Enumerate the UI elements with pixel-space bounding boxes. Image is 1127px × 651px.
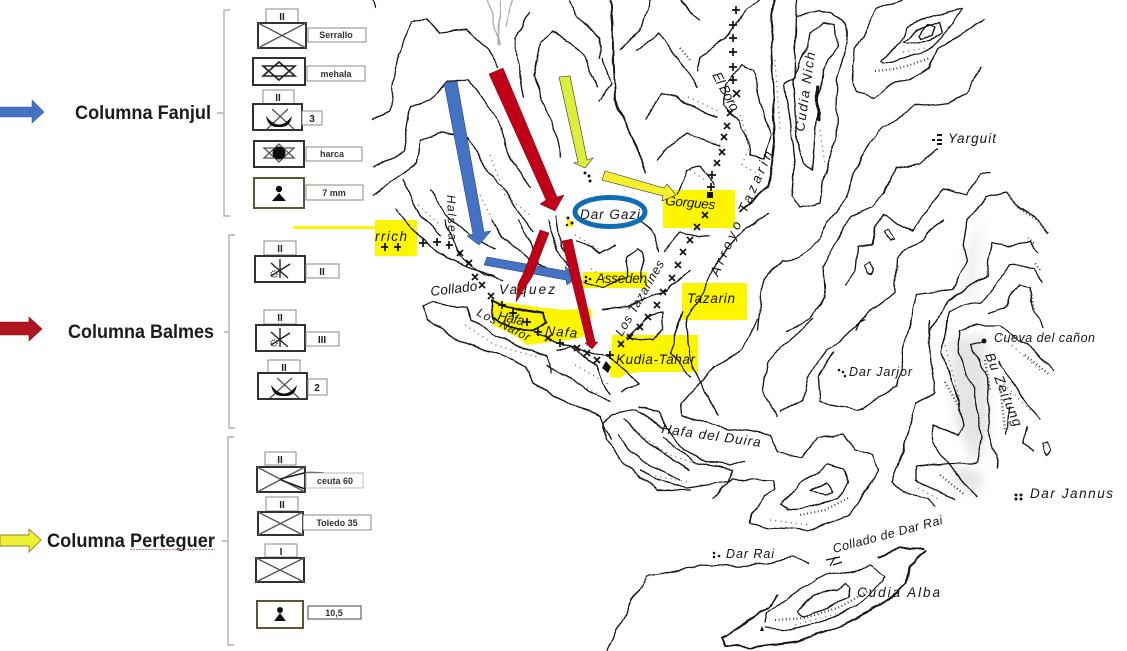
map labels: rrich: [375, 229, 407, 244]
unit: 3: 3: [309, 114, 315, 125]
arrow: red column first leg: [489, 68, 564, 211]
unit: 10,5: [257, 601, 361, 628]
arrow: blue column second leg: [484, 257, 577, 285]
pass symbol: Collado de Dar Rai: [826, 557, 842, 566]
map labels: Arroyo Tazarin: [707, 149, 776, 279]
unit: I: I: [280, 547, 283, 558]
unit: 7 mm: 7 mm: [322, 188, 346, 198]
bracket: Fanjul units: [217, 10, 230, 216]
heading: Columna Perteguer: Columna Perteguer: [47, 531, 216, 552]
map labels: [375, 51, 1113, 600]
map labels: Cudia Alba: [857, 585, 940, 600]
heading: Columna Balmes: Columna Balmes: [68, 322, 214, 343]
panel: legend of columns: [0, 9, 371, 645]
spelling squiggle: [130, 548, 215, 550]
arrow: blue column first leg: [444, 81, 491, 245]
unit: Serrallo: Serrallo: [319, 30, 353, 40]
map labels: Hafa del Duira: [661, 421, 762, 450]
map labels: El Boro: [709, 69, 743, 114]
unit: III: III: [318, 335, 326, 346]
unit: 7 mm: [254, 178, 363, 208]
unit: 10,5: 10,5: [325, 608, 343, 618]
unit: I: [256, 544, 304, 582]
arrow: yellow column first leg: [559, 76, 593, 168]
callout: Dar Gazi ring: [575, 198, 645, 226]
bracket: Balmes units: [224, 235, 235, 428]
unit: II: II: [319, 267, 325, 278]
map labels: Collado: [430, 278, 478, 299]
map labels: Los Tazarines: [612, 258, 667, 338]
map labels: Dar Rai: [726, 547, 775, 561]
map labels: Vaquez: [499, 282, 555, 297]
unit: 2: II: [281, 363, 287, 374]
unit: III: II: [277, 313, 283, 324]
map labels: Hafa: [496, 308, 526, 329]
map labels: Dar Gazi: [580, 207, 641, 222]
map: terrain and routes: [293, 0, 1113, 650]
unit: mehala: [253, 58, 365, 85]
unit: Serrallo: [258, 9, 366, 48]
bracket: Perteguer units: [222, 437, 234, 645]
shaded relief: [950, 215, 990, 495]
map labels: Halsea: [444, 195, 460, 240]
march route crosses: [381, 6, 740, 363]
map labels: Asseden: [595, 271, 647, 286]
arrow: red column third leg: [562, 239, 598, 349]
unit: ceuta 60: ceuta 60: [317, 476, 353, 486]
map labels: Los Nafor: [475, 305, 534, 344]
unit: II: [255, 241, 339, 282]
arrow: yellow: [0, 529, 41, 552]
unit: 2: 2: [314, 383, 320, 394]
map labels: Nafa: [545, 323, 578, 341]
unit: Toledo 35: II: [279, 500, 285, 511]
unit: 3: [253, 90, 322, 130]
map labels: Kudia-Tahar: [616, 352, 696, 367]
contour lines: [373, 0, 1053, 650]
legend group: Columna Perteguer: [0, 437, 371, 645]
unit: harca: harca: [320, 149, 345, 159]
unit: ceuta 60: [257, 452, 363, 492]
legend group: Columna Fanjul: [0, 9, 366, 216]
settlements: [566, 134, 1022, 631]
arrow: blue: [0, 100, 44, 123]
unit: mehala: mehala: [320, 69, 352, 79]
map labels: Yarguit: [948, 131, 997, 146]
hatching and dots: [418, 48, 1050, 625]
unit: harca: [254, 141, 362, 167]
arrow: red column second leg: [516, 230, 549, 302]
heading: Columna Fanjul: Columna Fanjul: [75, 103, 211, 124]
unit: III: [256, 310, 339, 351]
map labels: Dar Jarjor: [849, 365, 913, 379]
map labels: Bu Zeitung: [982, 351, 1026, 429]
map labels: Collado de Dar Rai: [831, 513, 945, 556]
map labels: Cueva del cañon: [994, 331, 1095, 345]
highlighted places: [293, 190, 747, 378]
map labels: Cudia Nich: [792, 51, 818, 132]
unit: 2: [258, 360, 327, 399]
unit: Serrallo: II: [279, 12, 285, 23]
unit: Toledo 35: Toledo 35: [316, 518, 358, 528]
arrow: yellow column second leg: [602, 171, 676, 201]
unit: Toledo 35: [258, 497, 371, 535]
arrow: red: [0, 317, 42, 341]
map labels: Gorgues: [665, 193, 716, 212]
unit: II: II: [277, 244, 283, 255]
unit: ceuta 60: II: [277, 455, 283, 466]
unit: 3: II: [275, 93, 281, 104]
map labels: Dar Jannus: [1030, 486, 1113, 501]
map labels: Tazarin: [687, 291, 735, 306]
legend group: Columna Balmes: [0, 235, 339, 428]
